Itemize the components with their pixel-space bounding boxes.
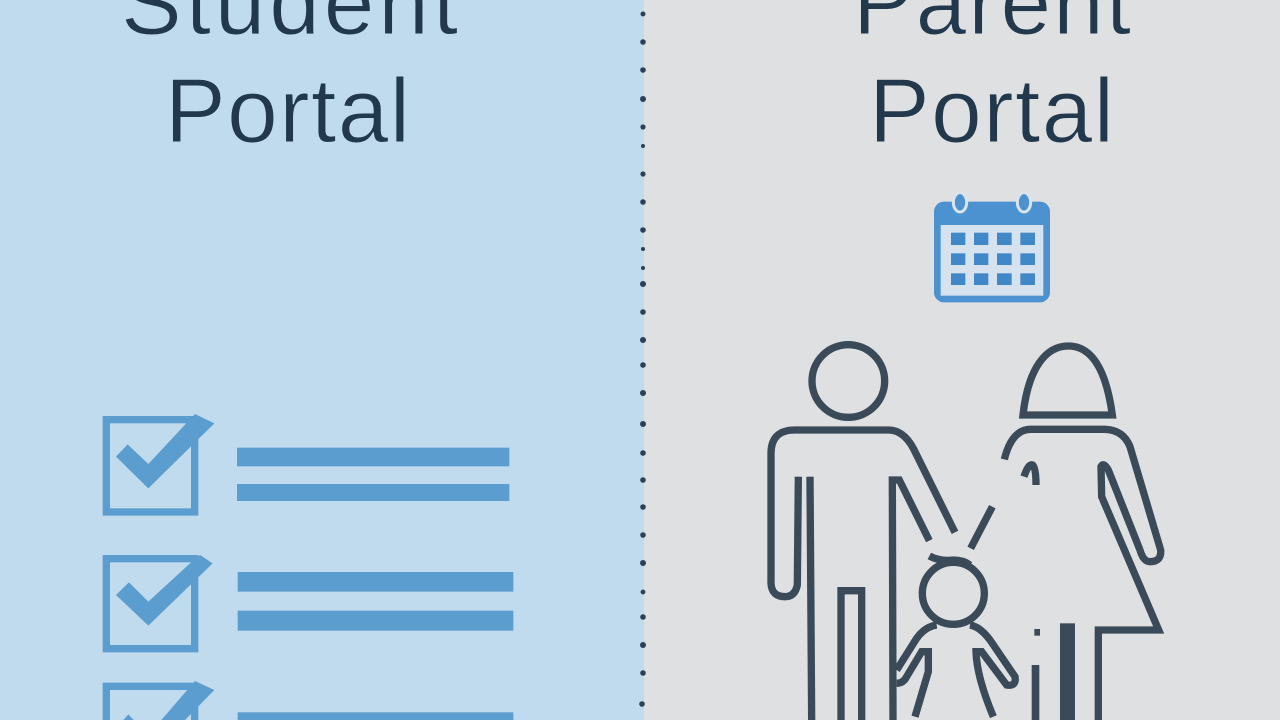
heading: parent portal	[853, 0, 1131, 162]
dotted divider	[639, 12, 646, 707]
figure: mother	[971, 346, 1161, 720]
checklist item 1	[106, 414, 509, 512]
icon: checklist	[106, 414, 513, 720]
panel: parent portal background	[644, 0, 1280, 720]
heading: parent portal: Portal	[869, 61, 1114, 162]
icon: family	[771, 345, 1161, 720]
figure: father	[771, 345, 955, 720]
figure: child	[897, 556, 1015, 717]
panel: student portal background	[0, 0, 644, 720]
checklist item 3	[106, 681, 513, 720]
heading: student portal	[121, 0, 458, 162]
heading: student portal: Portal	[165, 61, 410, 162]
icon: calendar	[934, 193, 1050, 302]
checklist item 2	[106, 555, 513, 649]
